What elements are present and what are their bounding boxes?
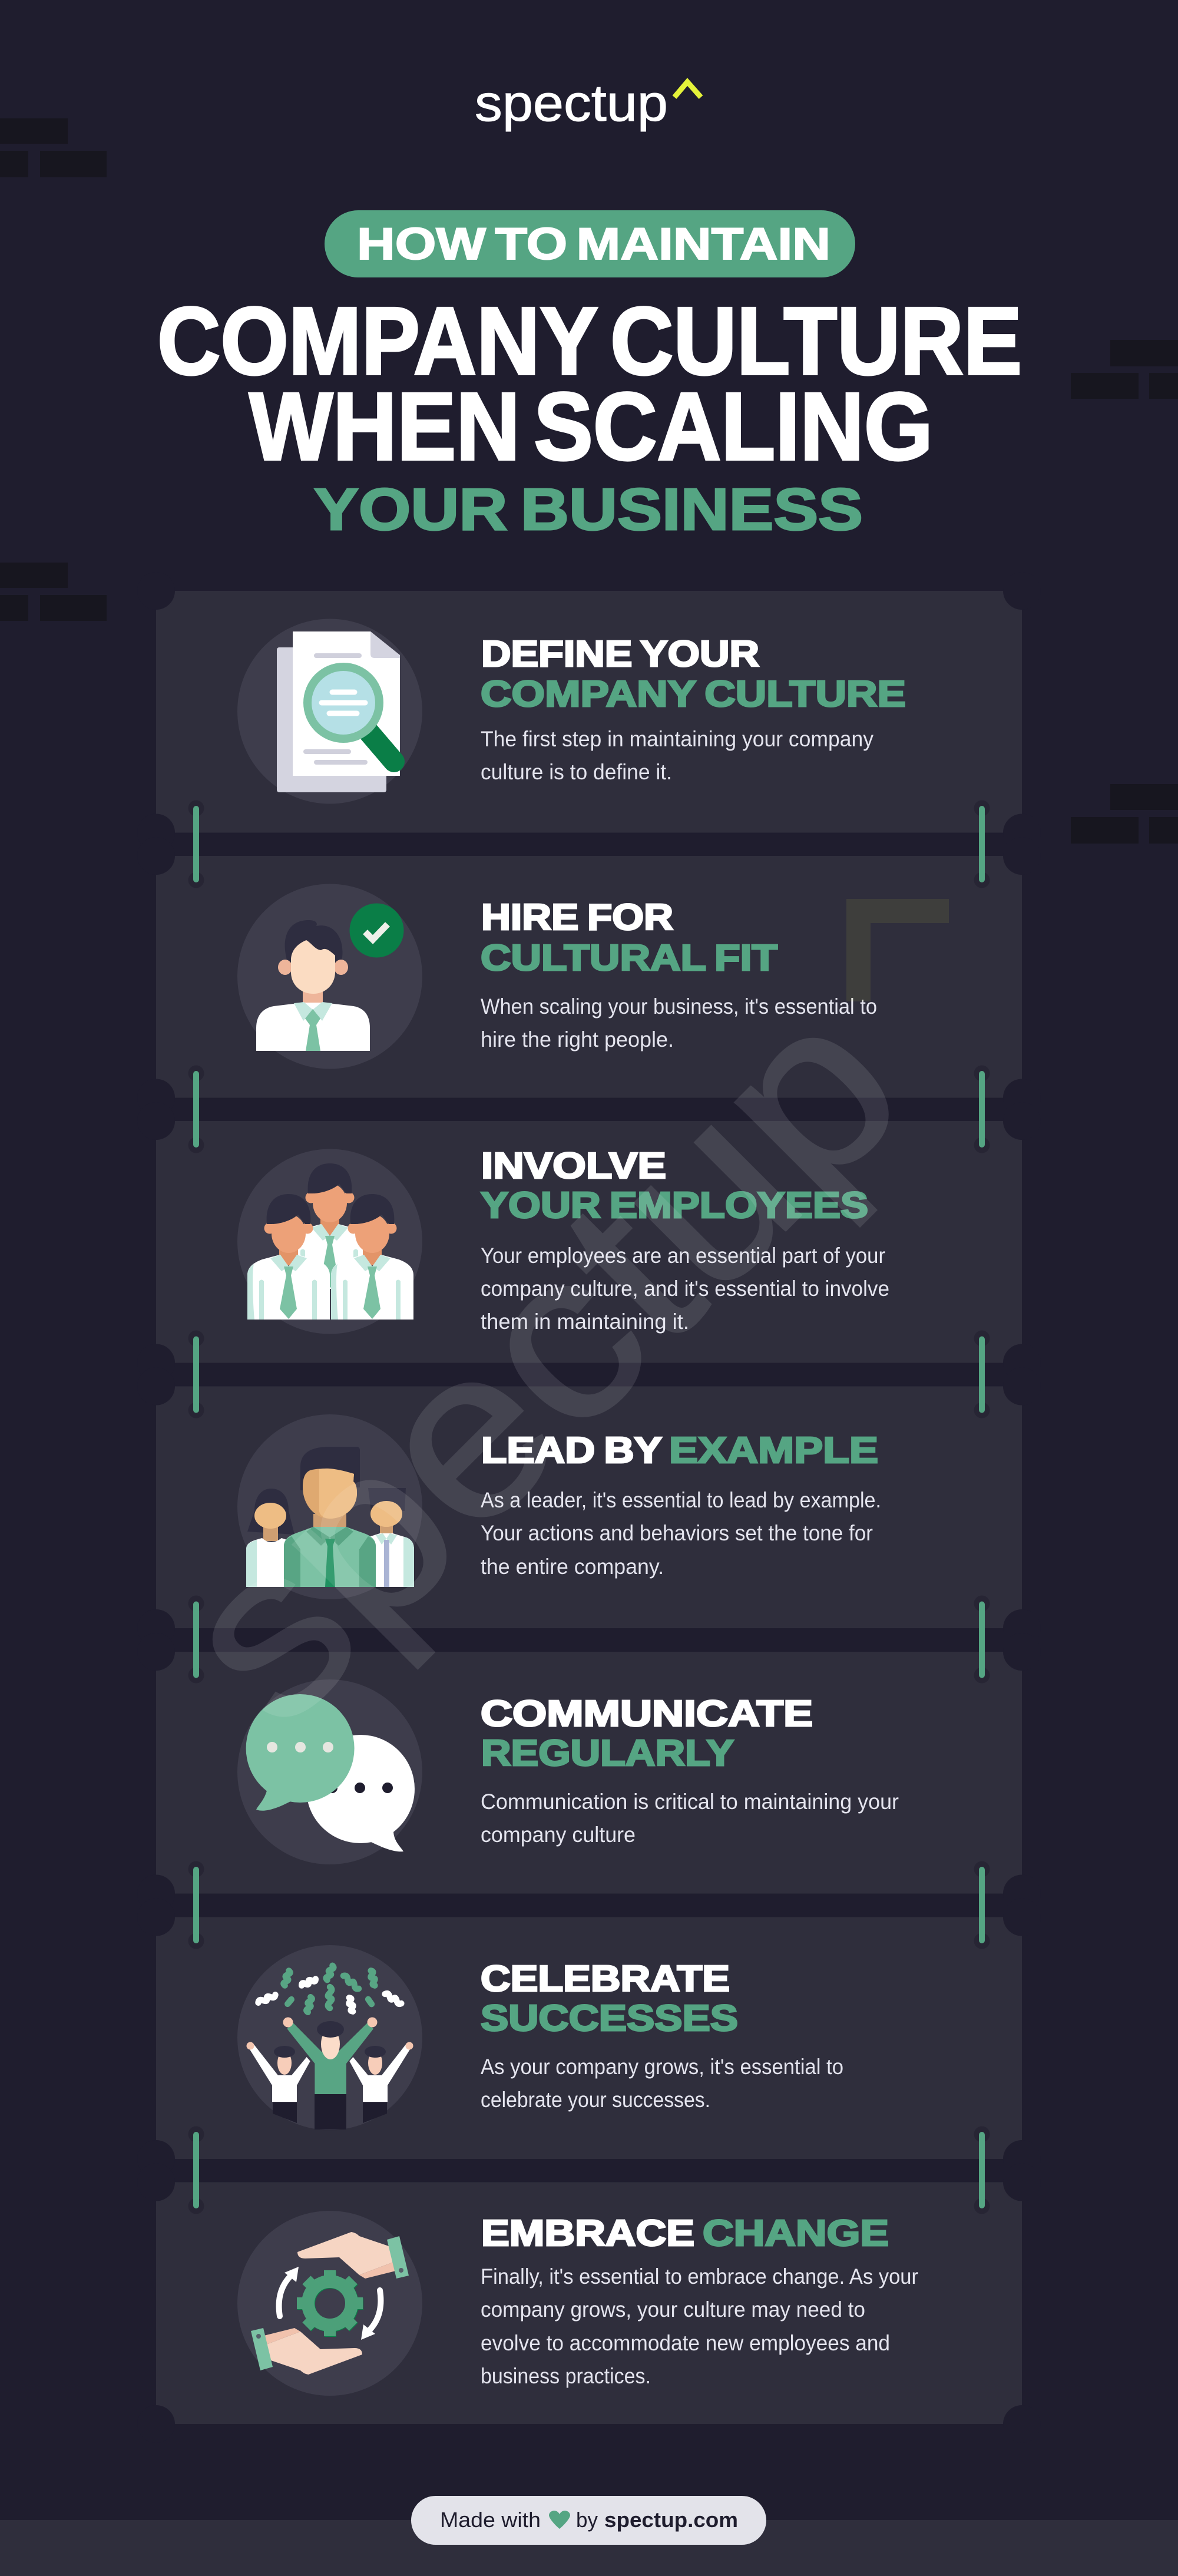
- footer badge: spectup.com: [604, 2508, 738, 2532]
- icon: leader with team: [237, 1414, 422, 1599]
- heading: YOUR EMPLOYEES: [481, 1185, 868, 1226]
- heading: HIRE FOR: [481, 897, 673, 938]
- heading: SUCCESSES: [481, 1998, 738, 2039]
- footer badge: by: [576, 2508, 598, 2532]
- body text: them in maintaining it.: [481, 1310, 689, 1334]
- heading: [481, 1146, 868, 1226]
- panel: involve your employees: [137, 1102, 1041, 1382]
- heading: LEAD BY: [481, 1430, 662, 1471]
- heading: [481, 1959, 738, 2039]
- body text: [481, 2055, 843, 2112]
- panel: celebrate successes: [137, 1898, 1041, 2178]
- heading: INVOLVE: [481, 1146, 666, 1186]
- main title: COMPANY CULTURE: [157, 287, 1022, 395]
- body text: hire the right people.: [481, 1027, 674, 1051]
- body text: As your company grows, it's essential to: [481, 2055, 843, 2079]
- heading: CULTURAL FIT: [481, 938, 777, 978]
- heading: EMBRACE: [481, 2213, 694, 2254]
- heading: COMPANY CULTURE: [481, 674, 906, 715]
- body text: business practices.: [481, 2364, 651, 2388]
- main title: YOUR BUSINESS: [314, 477, 863, 543]
- icon: approved candidate: [237, 884, 422, 1069]
- body text: [481, 1244, 889, 1334]
- panel: hire for cultural fit: [137, 837, 1041, 1117]
- body text: [481, 2264, 918, 2388]
- heading: CHANGE: [703, 2213, 889, 2254]
- heading: DEFINE YOUR: [481, 634, 759, 674]
- icon: celebrating team: [237, 1945, 422, 2130]
- body text: company culture, and it's essential to involve: [481, 1277, 889, 1301]
- body text: [481, 994, 877, 1051]
- heading: CELEBRATE: [481, 1959, 730, 1999]
- logo: spectup: [475, 75, 668, 132]
- footer strip: [0, 2520, 1178, 2576]
- footer badge: [411, 2496, 766, 2545]
- body text: Your employees are an essential part of your: [481, 1244, 885, 1268]
- body text: evolve to accommodate new employees and: [481, 2331, 890, 2355]
- watermark: spectup: [127, 950, 950, 1773]
- body text: company culture: [481, 1823, 636, 1847]
- heading: [481, 897, 777, 978]
- heading: [481, 1430, 878, 1471]
- heading: COMMUNICATE: [481, 1694, 813, 1734]
- icon: three employees: [237, 1149, 422, 1334]
- heading: [481, 634, 906, 715]
- body text: [481, 727, 873, 784]
- background bricks: [0, 118, 1178, 844]
- body text: celebrate your successes.: [481, 2088, 710, 2112]
- body text: The first step in maintaining your company: [481, 727, 873, 751]
- heading: [481, 2213, 889, 2254]
- body text: Your actions and behaviors set the tone for: [481, 1521, 873, 1545]
- body text: As a leader, it's essential to lead by example.: [481, 1488, 881, 1512]
- heading: [481, 1694, 813, 1774]
- panel: embrace change: [137, 2163, 1041, 2443]
- footer badge: Made with: [440, 2508, 541, 2532]
- title badge: HOW TO MAINTAIN: [357, 219, 830, 269]
- body text: Finally, it's essential to embrace change. As your: [481, 2264, 918, 2289]
- main title: WHEN SCALING: [249, 372, 933, 480]
- title badge: [325, 210, 855, 277]
- icon: chat bubbles: [237, 1679, 422, 1864]
- icon: heart: [549, 2511, 570, 2529]
- icon: hands and gear: [237, 2211, 422, 2396]
- heading: REGULARLY: [481, 1733, 734, 1774]
- body text: the entire company.: [481, 1555, 664, 1579]
- body text: company grows, your culture may need to: [481, 2297, 865, 2322]
- icon: document with magnifier: [237, 619, 422, 803]
- panel: communicate regularly: [137, 1633, 1041, 1912]
- body text: culture is to define it.: [481, 760, 672, 784]
- body text: Communication is critical to maintaining your: [481, 1790, 899, 1814]
- main title: [157, 287, 1022, 543]
- heading: EXAMPLE: [669, 1430, 878, 1471]
- panel: lead by example: [137, 1368, 1041, 1647]
- body text: When scaling your business, it's essential to: [481, 994, 877, 1019]
- panel: define your company culture: [137, 572, 1041, 852]
- body text: [481, 1488, 881, 1579]
- body text: [481, 1790, 899, 1847]
- connectors between panels: [188, 800, 990, 2214]
